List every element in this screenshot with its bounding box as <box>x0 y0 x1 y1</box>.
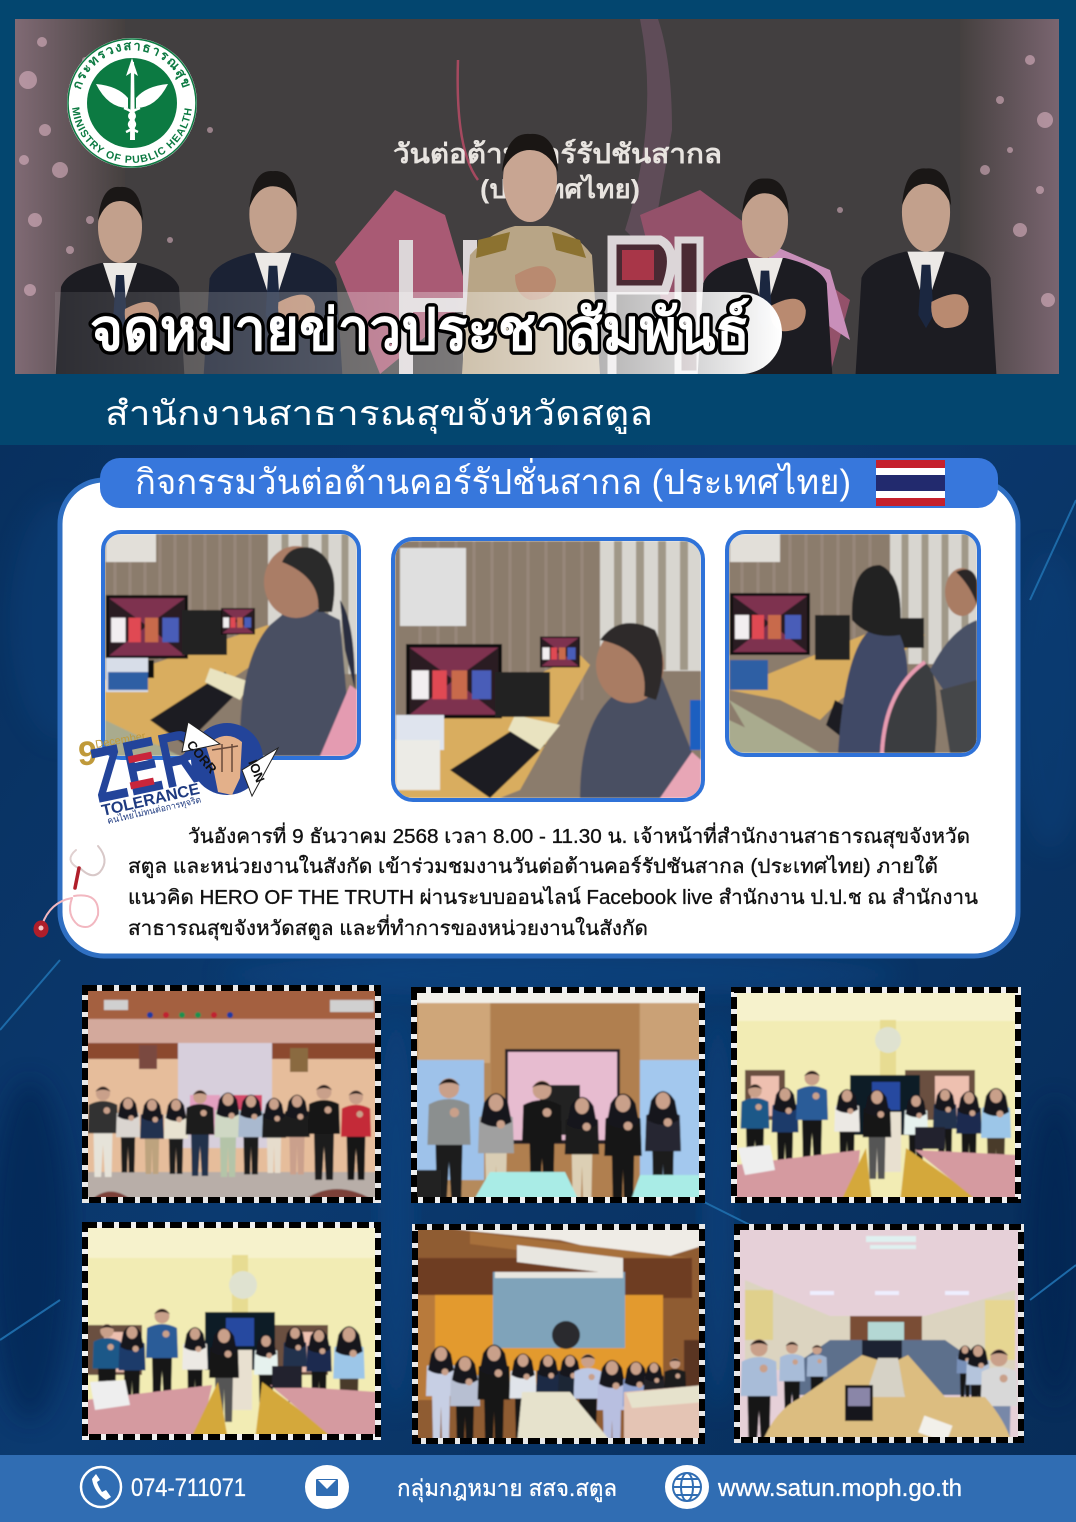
body text: สตูล และหน่วยงานในสังกัด เข้าร่วมชมงานวันต่อต้านคอร์รัปชันสากล (ประเทศไทย) ภายใต้ <box>128 855 938 879</box>
banner photo: officials: (ประเทศไทย) <box>480 173 640 204</box>
icon: stethoscope <box>34 846 105 937</box>
icon: mail <box>305 1465 349 1509</box>
banner photo: officials <box>15 19 1059 386</box>
background world map pattern <box>0 500 1076 1420</box>
icon: zero tolerance logo: TOLERANCE <box>100 781 202 820</box>
photo: group with yellow wall, top right <box>731 987 1021 1203</box>
icon: zero tolerance logo: 9 <box>78 735 97 773</box>
icon: phone <box>81 1467 121 1507</box>
icon: zero tolerance logo: CORR <box>184 737 220 777</box>
banner photo: officials: วันต่อต้านคอร์รัปชันสากล <box>393 138 722 169</box>
photo: staff with projector screen <box>412 1224 705 1454</box>
photo: group in hall with hero screen <box>82 985 381 1203</box>
body text <box>128 822 978 941</box>
heading ribbon: กิจกรรมวันต่อต้านคอร์รัปชั่นสากล (ประเทศไทย) <box>135 458 851 502</box>
photo: woman and man watching screen, right <box>727 532 979 755</box>
heading ribbon <box>100 458 998 508</box>
icon: Thai flag <box>876 460 945 506</box>
logo: Ministry of Public Health: กระทรวงสาธารณสุข <box>74 42 190 90</box>
center speaker in khaki uniform <box>462 134 600 374</box>
icon: zero tolerance logo: ION <box>245 758 268 785</box>
body text: สาธารณสุขจังหวัดสตูล และที่ทำการของหน่วยงานในสังกัด <box>128 914 648 941</box>
department name: กลุ่มกฎหมาย สสจ.สตูล <box>397 1475 617 1502</box>
website: www.satun.moph.go.th <box>717 1475 962 1502</box>
photo: man watching screen, centre <box>393 539 703 800</box>
header band <box>0 0 1076 445</box>
icon: zero tolerance logo: ZER <box>83 711 207 820</box>
footer bar <box>0 1455 1076 1522</box>
phone number: 074-711071 <box>131 1474 246 1502</box>
subtitle: สำนักงานสาธารณสุขจังหวัดสตูล <box>105 395 653 434</box>
photo: group with yellow wall, bottom left <box>82 1222 381 1440</box>
title pill: จดหมายข่าวประชาสัมพันธ์ <box>90 297 750 363</box>
photo: wide meeting room <box>734 1224 1024 1459</box>
stage graphic behind speakers <box>625 19 672 255</box>
icon: zero tolerance logo: คนไทยไม่ทนต่อการทุจริต <box>106 795 202 827</box>
photo: man watching screen, left <box>103 532 359 758</box>
photo: group with TV, wood wall <box>411 987 705 1211</box>
panel: activity card <box>34 458 1018 956</box>
body text: วันอังคารที่ 9 ธันวาคม 2568 เวลา 8.00 - 11.30 น. เจ้าหน้าที่สำนักงานสาธารณสุขจังหวัด <box>188 822 970 849</box>
body text: แนวคิด HERO OF THE TRUTH ผ่านระบบออนไลน์ Facebook live สำนักงาน ป.ป.ช ณ สำนักงาน <box>128 886 978 909</box>
logo: Ministry of Public Health <box>67 38 197 168</box>
icon: zero tolerance logo: December <box>94 730 147 751</box>
icon: globe <box>665 1465 709 1509</box>
logo: Ministry of Public Health: MINISTRY OF PUBLIC HEALTH <box>72 107 192 163</box>
